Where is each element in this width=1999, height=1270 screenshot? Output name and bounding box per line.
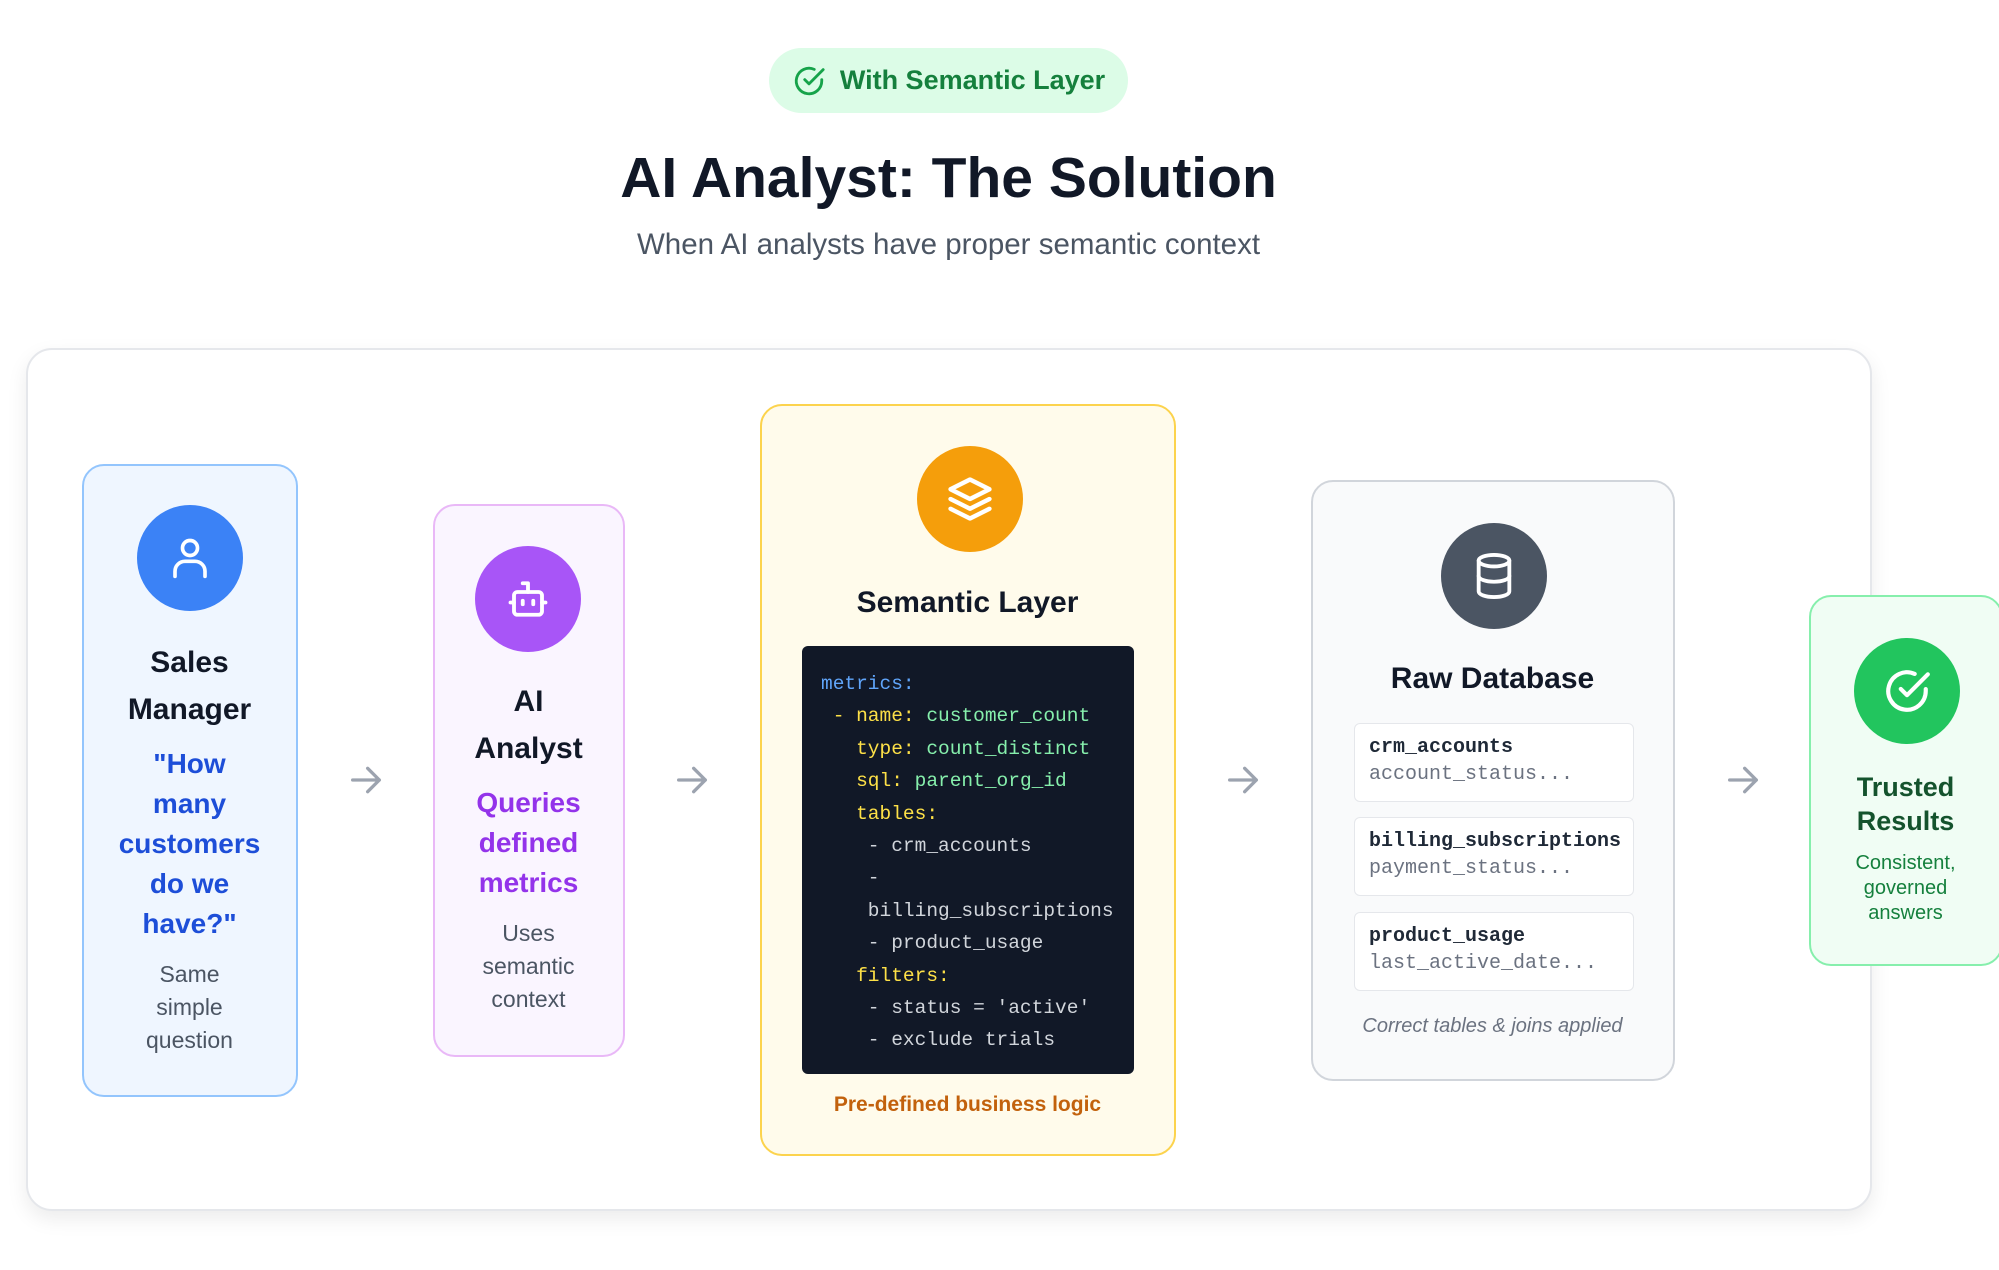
description: Queries: [476, 787, 581, 818]
heading: Sales: [150, 646, 229, 679]
quote: have?": [142, 908, 237, 939]
table: billing: payment_status...: [1369, 857, 1573, 880]
note: context: [491, 986, 566, 1012]
heading: Results: [1857, 806, 1954, 836]
code block: metrics: - name: customer_count type: count_distinct sql: parent_org_id tables: - crm_accounts - billing_subscriptions - product_usage filters: - status = 'active' - exclude trials: [821, 673, 1114, 1051]
description: metrics: [479, 867, 578, 898]
note: question: [146, 1027, 233, 1053]
badge: With Semantic Layer: [840, 65, 1105, 95]
description: governed: [1864, 877, 1947, 899]
table: billing: [1354, 817, 1634, 896]
description: defined: [479, 827, 578, 858]
description: [1855, 852, 1956, 924]
heading: [1857, 772, 1954, 836]
icon: check: [1854, 638, 1960, 744]
table: product_usage: product_usage: [1369, 925, 1525, 948]
panel: ai analyst: [433, 504, 625, 1057]
icon: user: [137, 505, 243, 611]
table: billing: billing_subscriptions: [1369, 830, 1621, 853]
quote: do we: [150, 868, 229, 899]
description: answers: [1868, 902, 1943, 924]
quote: customers: [119, 828, 260, 859]
quote: "How: [153, 748, 226, 779]
panel: semantic layer: [760, 404, 1176, 1156]
heading: Trusted: [1857, 772, 1954, 802]
heading: [474, 685, 583, 765]
note: [146, 961, 233, 1053]
table: product_usage: [1354, 912, 1634, 991]
table: crm_accounts: crm_accounts: [1369, 736, 1513, 759]
note: Same: [159, 961, 220, 987]
heading: Analyst: [474, 732, 583, 765]
heading: Manager: [128, 693, 251, 726]
note: simple: [156, 994, 223, 1020]
description: [476, 787, 581, 898]
panel: trusted results: [1809, 595, 1999, 966]
icon: layers: [917, 446, 1023, 552]
arrow: [1228, 766, 1258, 794]
note: Uses: [502, 920, 555, 946]
heading: [128, 646, 251, 726]
arrow: [1728, 766, 1758, 794]
note: [482, 920, 575, 1012]
arrow: [351, 766, 381, 794]
quote: many: [153, 788, 226, 819]
quote: [119, 748, 260, 939]
table: crm_accounts: account_status...: [1369, 763, 1573, 786]
arrow: [677, 766, 707, 794]
note: semantic: [482, 953, 575, 979]
description: Consistent,: [1855, 852, 1956, 874]
icon: robot: [475, 546, 581, 652]
icon: database: [1441, 523, 1547, 629]
badge: [769, 48, 1128, 113]
subtitle: When AI analysts have proper semantic context: [637, 228, 1260, 261]
main panel: [26, 348, 1872, 1211]
panel: sales manager: [82, 464, 298, 1097]
panel: raw database: [1311, 480, 1675, 1081]
heading: Raw Database: [1391, 662, 1594, 695]
table: crm_accounts: [1354, 723, 1634, 802]
heading: Semantic Layer: [857, 586, 1078, 619]
heading: AI: [514, 685, 544, 718]
title: AI Analyst: The Solution: [620, 146, 1277, 210]
caption: Correct tables & joins applied: [1362, 1015, 1623, 1037]
table: product_usage: last_active_date...: [1369, 952, 1597, 975]
caption: Pre-defined business logic: [834, 1093, 1101, 1116]
